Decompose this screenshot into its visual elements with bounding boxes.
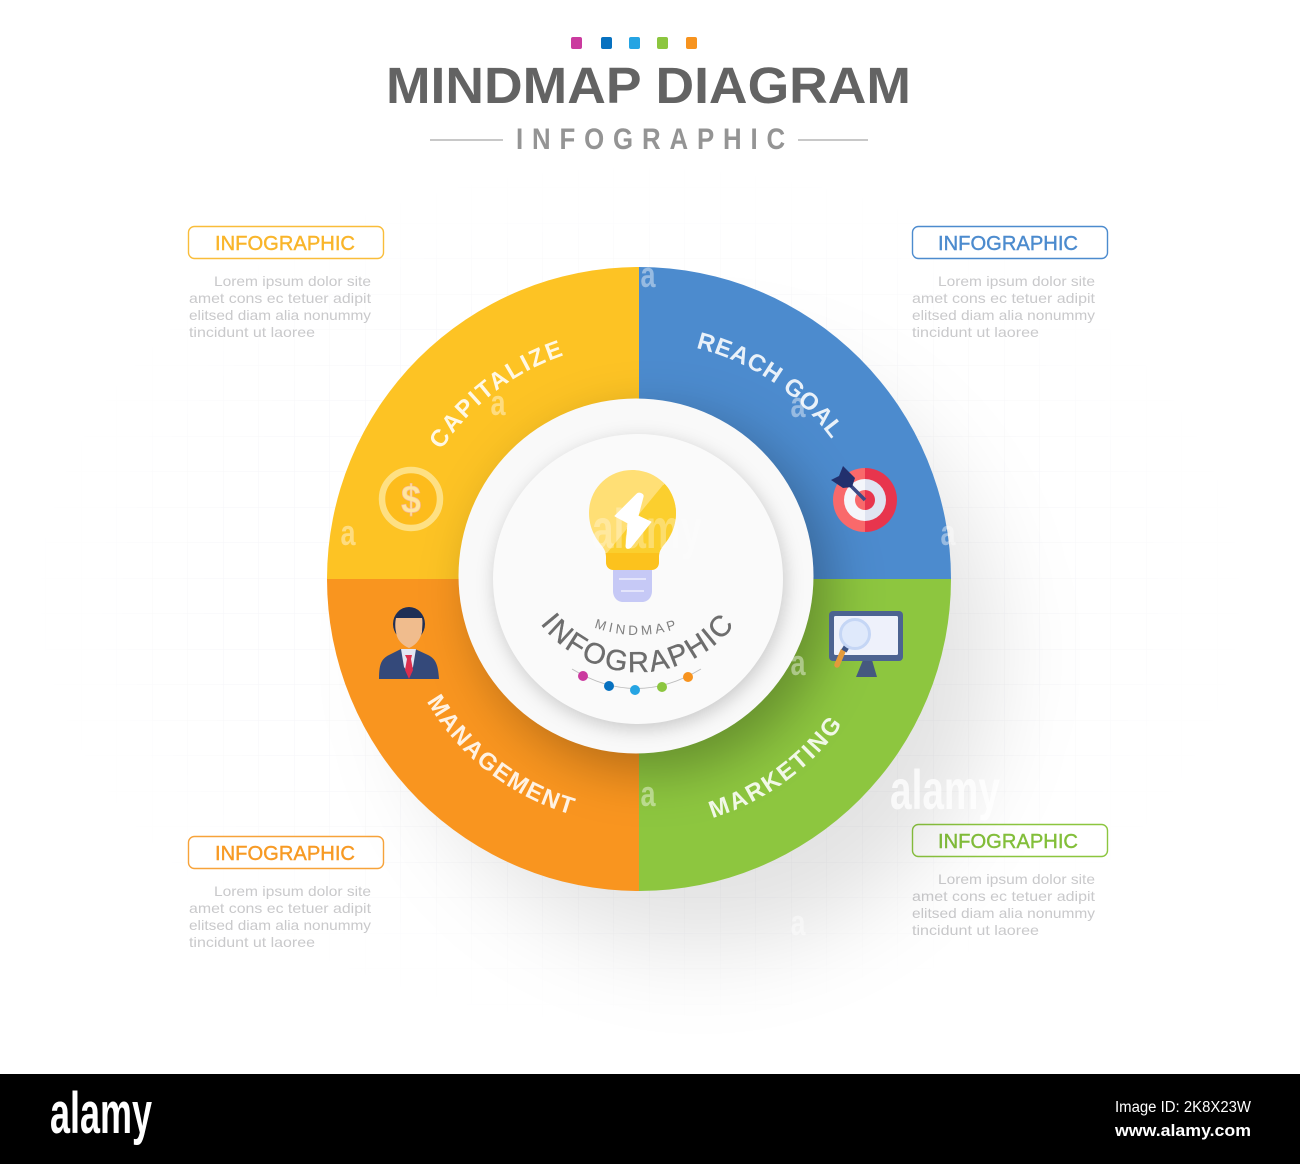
segment: reach goal [639,267,951,579]
callout: bottom left [188,836,384,950]
callout: top left [188,226,384,340]
watermark: a [790,384,806,425]
callout: top left: Lorem ipsum dolor site [214,274,371,289]
callout: top right [912,226,1108,340]
subtitle: INFOGRAPHIC [516,122,785,155]
ring label: marketing: MARKETING [708,718,840,818]
footer url: www.alamy.com [1114,1122,1251,1140]
callout: top right: tincidunt ut laoree [912,325,1039,340]
callout: bottom right: amet cons ec tetuer adipit [912,889,1095,904]
center disc shadow on ring [474,416,830,772]
callout: top left: amet cons ec tetuer adipit [189,291,371,306]
segment: capitalize [327,267,639,579]
icon: businessman [379,607,439,679]
footer image id: Image ID: 2K8X23W [1115,1099,1251,1116]
center label: mindmap: MINDMAP [595,619,674,635]
callout: top right: INFOGRAPHIC [938,232,1078,255]
callout: bottom right: Lorem ipsum dolor site [938,872,1095,887]
callout: bottom left: INFOGRAPHIC [215,842,355,865]
center dot garland [572,669,701,695]
callout: bottom right: tincidunt ut laoree [912,923,1039,938]
icon: light bulb [589,470,676,602]
watermark: a [490,382,506,423]
callout: top right: Lorem ipsum dolor site [938,274,1095,289]
callout: bottom right: INFOGRAPHIC [938,830,1078,853]
ring shadow [405,360,995,950]
watermark: a [640,254,656,295]
segment: marketing [639,579,951,891]
callout: bottom left: amet cons ec tetuer adipit [189,901,371,916]
ring label: reach goal: REACH GOAL [697,332,839,438]
watermark: alamy [592,497,702,560]
watermark [340,254,1000,943]
watermark: a [640,773,656,814]
watermark: a [940,512,956,553]
footer logo: alamy [50,1081,152,1146]
callout: top right: amet cons ec tetuer adipit [912,291,1095,306]
watermark: alamy [890,758,1000,821]
callout: bottom right [912,824,1108,938]
callout: bottom left: elitsed diam alia nonummy [189,918,371,933]
callout: top right: elitsed diam alia nonummy [912,308,1095,323]
segment: management [327,579,639,891]
footer bar [0,1074,1300,1164]
callout: bottom right: elitsed diam alia nonummy [912,906,1095,921]
callout: top left: elitsed diam alia nonummy [189,308,371,323]
callout: top left: tincidunt ut laoree [189,325,315,340]
header color squares [571,37,697,49]
callout: bottom left: Lorem ipsum dolor site [214,884,371,899]
icon: target with dart [831,466,897,532]
watermark: a [790,642,806,683]
ring label: capitalize: CAPITALIZE [430,340,563,446]
icon: coin: $ [401,478,421,522]
icon: coin [382,470,440,528]
icon: monitor with magnifier [829,611,903,677]
center inner disc shadow [495,439,785,729]
callout: bottom left: tincidunt ut laoree [189,935,315,950]
watermark: a [790,902,806,943]
center inner disc [493,434,783,724]
watermark: a [340,512,356,553]
title: MINDMAP DIAGRAM [386,57,911,114]
callout: top left: INFOGRAPHIC [215,232,355,255]
donut ring [327,267,951,891]
center label: infographic: INFOGRAPHIC [542,612,731,672]
ring label: management: MANAGEMENT [427,694,576,813]
center outer disc [458,398,814,754]
